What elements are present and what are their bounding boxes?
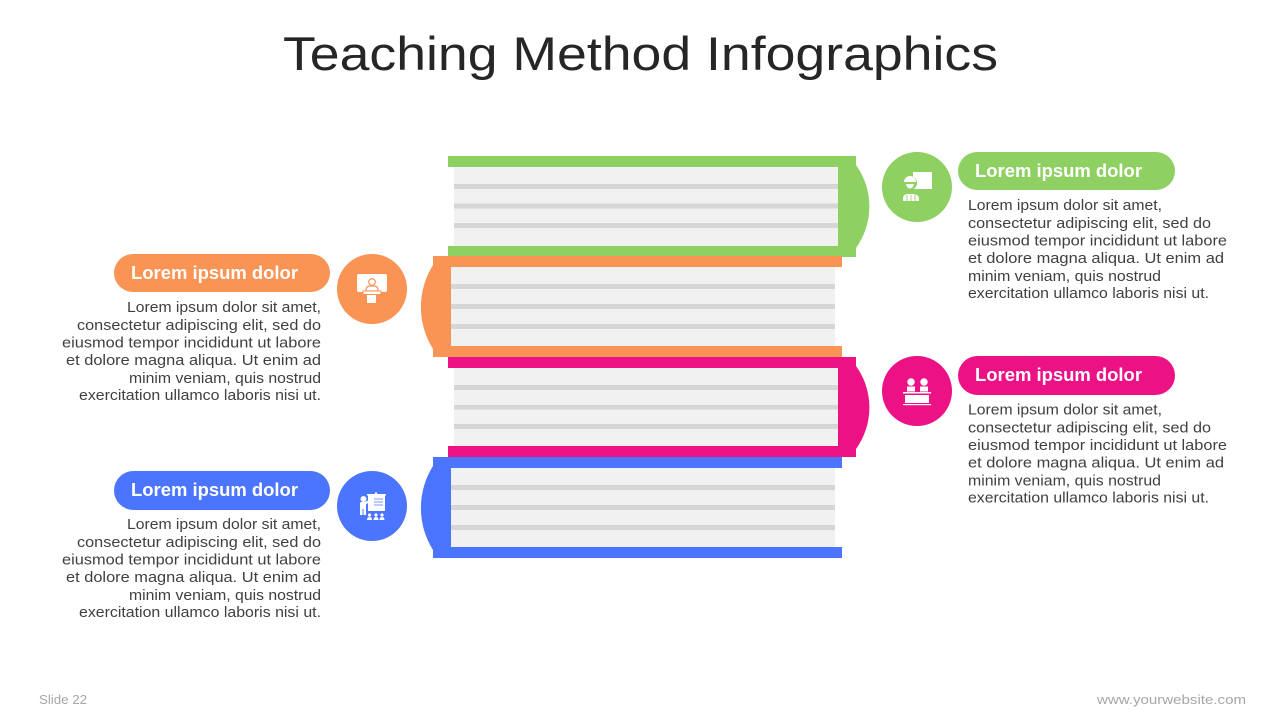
book: blue [421,457,842,558]
heading pill: blue [114,471,330,510]
heading pill: orange: Lorem ipsum dolor [131,262,298,283]
heading pill: pink: Lorem ipsum dolor [975,364,1142,385]
text block: pink: Lorem ipsum dolor sit amet, [968,402,1162,418]
text block: pink: et dolore magna aliqua. Ut enim ad [968,456,1224,472]
heading pill: green [958,152,1175,190]
text block: pink: minim veniam, quis nostrud [968,474,1161,490]
text block: blue: minim veniam, quis nostrud [129,588,321,604]
text block: green: Lorem ipsum dolor sit amet, [968,198,1162,214]
text block: blue: consectetur adipiscing elit, sed do [77,535,321,551]
text block: green: et dolore magna aliqua. Ut enim ad [968,251,1224,267]
icon: presenter with chart and audience (blue) [337,471,407,541]
text block: blue [62,517,321,621]
icon: two speakers at table (pink) [882,356,952,426]
text block: green: minim veniam, quis nostrud [968,269,1161,285]
text block: green: eiusmod tempor incididunt ut labore [968,234,1227,250]
book: orange [421,256,842,357]
text block: pink [968,402,1227,506]
text block: green: exercitation ullamco laboris nisi ut. [968,286,1209,302]
heading pill: pink [958,356,1175,395]
text block: blue: exercitation ullamco laboris nisi ut. [79,605,321,621]
text block: pink: exercitation ullamco laboris nisi ut. [968,490,1209,506]
text block: blue: Lorem ipsum dolor sit amet, [127,517,321,533]
text block: blue: eiusmod tempor incididunt ut labore [62,552,321,568]
icon: teacher with speech board (green) [882,152,952,222]
book: pink [448,357,869,457]
text block: green: consectetur adipiscing elit, sed do [968,216,1211,232]
text block: orange [62,300,321,404]
footer: slide number: Slide 22 [39,692,87,707]
book: green [448,156,869,257]
text block: pink: eiusmod tempor incididunt ut labore [968,438,1227,454]
title: Teaching Method Infographics [283,27,998,80]
text block: orange: exercitation ullamco laboris nisi ut. [79,388,321,404]
heading pill: green: Lorem ipsum dolor [975,160,1142,181]
footer: website: www.yourwebsite.com [1096,692,1246,707]
icon: presenter at podium (orange) [337,254,407,324]
text block: blue: et dolore magna aliqua. Ut enim ad [66,570,321,586]
text block: orange: Lorem ipsum dolor sit amet, [127,300,321,316]
text block: pink: consectetur adipiscing elit, sed do [968,420,1211,436]
book stack [421,156,869,558]
text block: orange: minim veniam, quis nostrud [129,371,321,387]
text block: orange: eiusmod tempor incididunt ut labore [62,336,321,352]
heading pill: orange [114,254,330,292]
text block: orange: et dolore magna aliqua. Ut enim ad [66,353,321,369]
text block: green [968,198,1227,302]
heading pill: blue: Lorem ipsum dolor [131,479,298,500]
text block: orange: consectetur adipiscing elit, sed do [77,318,321,334]
